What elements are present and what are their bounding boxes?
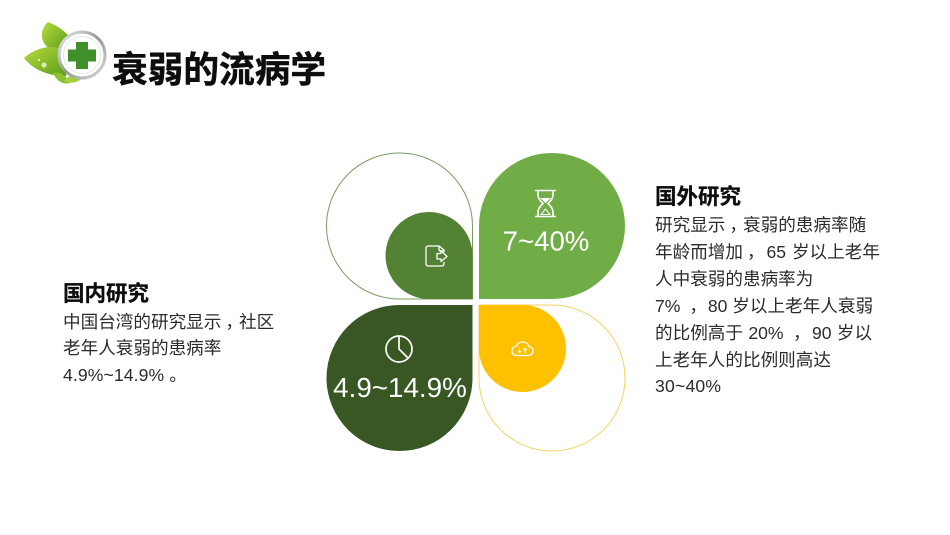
- petal: bottom-right outline: [479, 305, 625, 451]
- petal: bottom-left filled: [326, 305, 472, 451]
- body text: international research: 7% ， 80 岁以上老年人衰弱: [655, 296, 873, 316]
- heading: international research: 国外研究: [655, 185, 741, 209]
- heading: domestic research: 国内研究: [63, 282, 149, 306]
- logo: leaves and green cross badge: [24, 22, 106, 84]
- body text: international research: 上老年人的比例则高达: [655, 350, 831, 370]
- body text: international research: [655, 215, 880, 396]
- body text: domestic research: 4.9%~14.9% 。: [63, 365, 187, 385]
- value: 4.9~14.9%: 4.9~14.9%: [333, 372, 467, 403]
- body text: international research: 人中衰弱的患病率为: [655, 269, 813, 289]
- text block: international research: [655, 185, 880, 396]
- body text: domestic research: 中国台湾的研究显示，社区: [63, 312, 274, 332]
- title: 衰弱的流病学: [112, 50, 326, 90]
- icon: document export: [426, 246, 447, 266]
- body text: international research: 30~40%: [655, 376, 721, 396]
- text block: domestic research: [63, 282, 274, 385]
- body text: international research: 年龄而增加， 65 岁以上老年: [655, 242, 880, 262]
- body text: domestic research: [63, 312, 274, 385]
- icon: cloud transfer: [512, 342, 533, 356]
- petal: top-left outline: [326, 153, 472, 299]
- body text: international research: 研究显示，衰弱的患病率随: [655, 215, 866, 235]
- petal: top-left small filled: [385, 212, 472, 299]
- clover chart: [326, 152, 626, 452]
- icon: hourglass: [535, 190, 556, 216]
- body text: domestic research: 老年人衰弱的患病率: [63, 338, 221, 358]
- icon: clock: [386, 336, 412, 362]
- petal: top-right filled: [479, 153, 625, 299]
- value: 7~40%: 7~40%: [503, 226, 589, 256]
- body text: international research: 的比例高于 20% ， 90 岁以: [655, 323, 872, 343]
- petal: bottom-right small filled: [479, 305, 566, 392]
